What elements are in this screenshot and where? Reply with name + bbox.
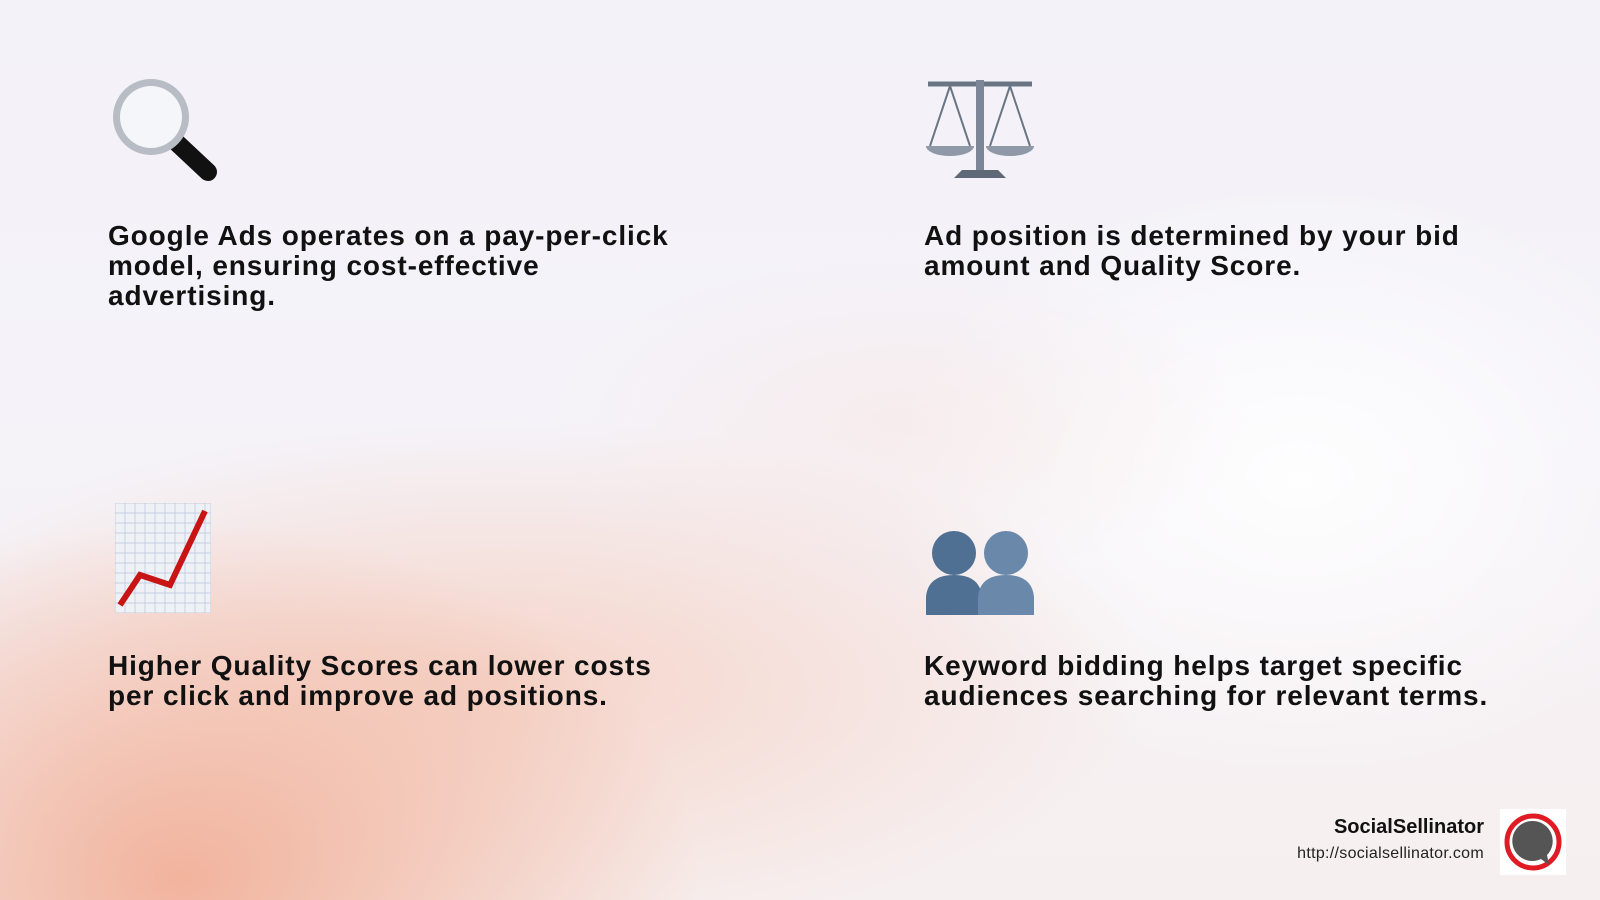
text: keyword bidding: Keyword bidding helps target specific audiences searching for relevant terms. xyxy=(924,650,1488,711)
brand text: SocialSellinator xyxy=(1334,816,1484,838)
text: ad position: Ad position is determined by your bid amount and Quality Score. xyxy=(924,220,1460,281)
text: quality scores: Higher Quality Scores can lower costs per click and improve ad positions. xyxy=(108,650,652,711)
text: pay-per-click: Google Ads operates on a pay-per-click model, ensuring cost-effective advertising. xyxy=(108,220,669,311)
icon: people xyxy=(926,531,1034,615)
brand text: http://socialsellinator.com xyxy=(1297,845,1484,862)
brand text xyxy=(1297,816,1484,862)
icon: chart xyxy=(115,503,211,613)
icon: magnifying glass xyxy=(113,79,217,181)
icon: scales xyxy=(926,80,1034,178)
logo xyxy=(1500,809,1566,875)
